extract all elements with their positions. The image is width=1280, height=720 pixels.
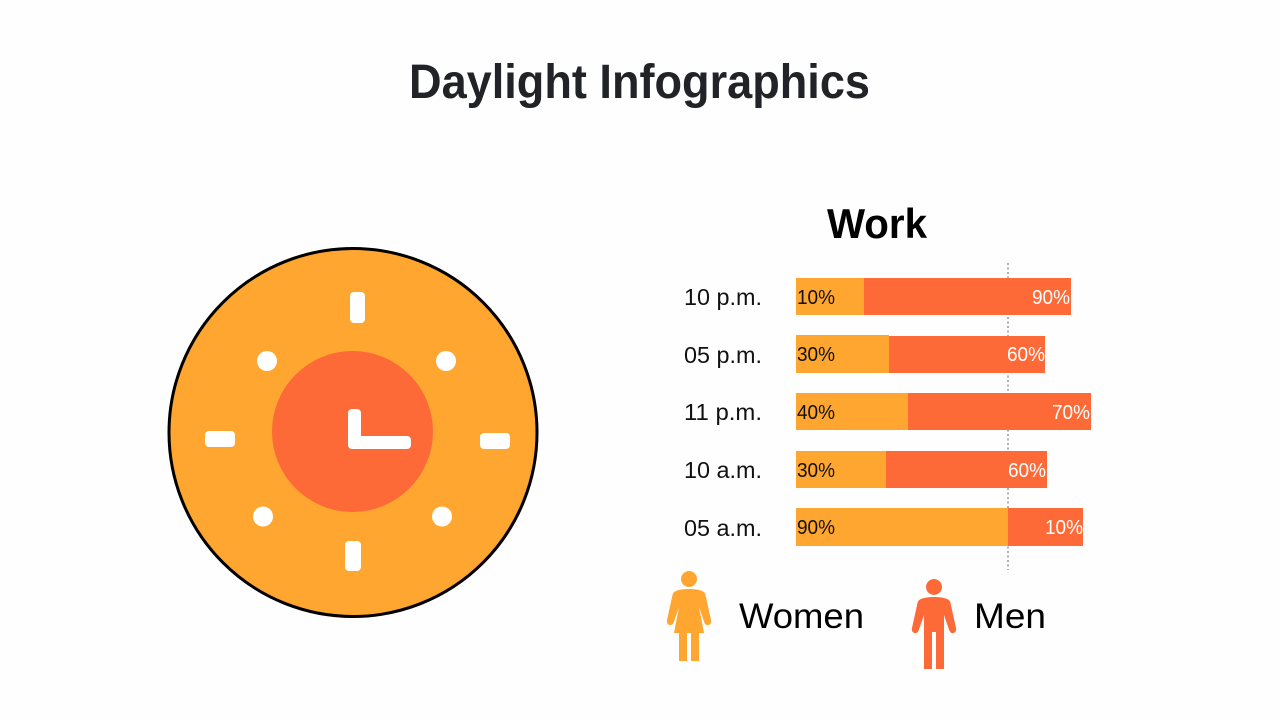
- icon: woman: [667, 571, 711, 661]
- clock face: [169, 248, 537, 616]
- hour markers: [205, 292, 510, 571]
- clock icon: [169, 248, 537, 616]
- clock hands: [348, 409, 411, 449]
- icon: man: [912, 579, 956, 669]
- row: 05 a.m.: 10%: [1045, 517, 1083, 539]
- row: 10 p.m.: 90%: [1032, 287, 1070, 309]
- row: 05 p.m.: 60%: [1007, 344, 1045, 366]
- row: 10 a.m.: 30%: [797, 460, 835, 482]
- row: 05 p.m.: 30%: [797, 344, 835, 366]
- row: 10 p.m.: 10 p.m.: [684, 284, 762, 310]
- row: 11 p.m.: 11 p.m.: [684, 399, 762, 425]
- row: 10 p.m.: [684, 278, 1071, 315]
- row: 05 a.m.: 90%: [797, 517, 835, 539]
- row: 10 a.m.: 60%: [1008, 460, 1046, 482]
- clock centre disc: [272, 351, 433, 512]
- row: 05 a.m.: 05 a.m.: [684, 515, 762, 541]
- title: Daylight Infographics: [409, 56, 870, 109]
- label: men: Men: [974, 597, 1046, 636]
- row: 05 p.m.: [684, 335, 1045, 373]
- row: 05 p.m.: 05 p.m.: [684, 342, 762, 368]
- row: 11 p.m.: 70%: [1052, 402, 1090, 424]
- row: 11 p.m.: 40%: [797, 402, 835, 424]
- reference dotted line: [1007, 263, 1009, 570]
- row: 10 a.m.: 10 a.m.: [684, 457, 762, 483]
- row: 11 p.m.: [684, 393, 1091, 430]
- bar chart: [684, 263, 1091, 570]
- legend: men: [912, 579, 1046, 669]
- row: 05 a.m.: [684, 508, 1083, 546]
- legend: women: [667, 571, 864, 661]
- chart heading: Work: [827, 200, 928, 247]
- row: 10 p.m.: 10%: [797, 287, 835, 309]
- label: women: Women: [739, 597, 864, 636]
- row: 10 a.m.: [684, 451, 1047, 488]
